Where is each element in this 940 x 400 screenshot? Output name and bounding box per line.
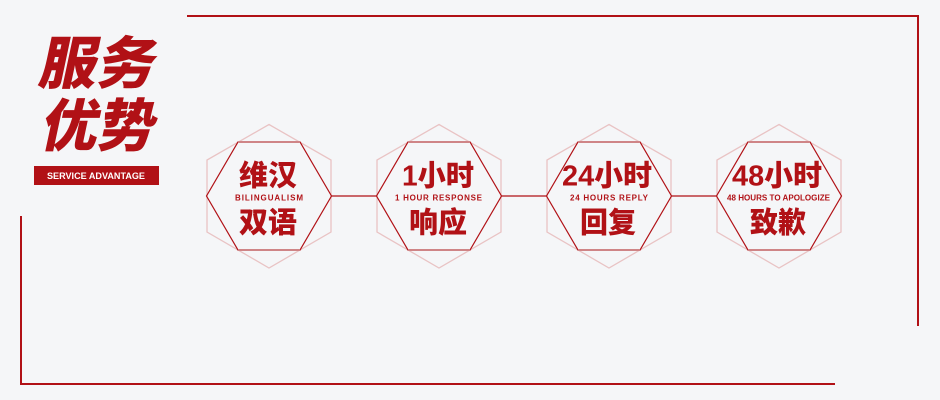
step 1: bilingualism: BILINGUALISM <box>235 194 303 202</box>
step 3: 24 hours reply: 24 HOURS REPLY <box>570 194 649 202</box>
step 1: bilingualism: 双语 <box>239 206 297 240</box>
step 2: 1 hour response: 1 HOUR RESPONSE <box>395 194 483 202</box>
step 3: 24 hours reply <box>546 124 672 268</box>
title <box>34 33 164 159</box>
step 4: 48 hours to apologize: 48小时 <box>732 160 822 192</box>
connector lines <box>331 195 717 197</box>
step 4: 48 hours to apologize <box>716 124 842 268</box>
frame: bottom left corner <box>21 216 835 384</box>
step 1: bilingualism <box>206 124 332 268</box>
step 3: 24 hours reply: 24小时 <box>562 160 652 192</box>
title: 优势 <box>36 96 164 159</box>
step 4: 48 hours to apologize: 致歉 <box>750 206 806 240</box>
step 2: 1 hour response <box>376 124 502 268</box>
step 3: 24 hours reply: 回复 <box>580 206 636 240</box>
step 2: 1 hour response: 1小时 <box>402 160 474 192</box>
frame: top right corner <box>187 16 918 326</box>
subtitle badge: SERVICE ADVANTAGE <box>47 171 145 182</box>
step 2: 1 hour response: 响应 <box>409 206 467 240</box>
subtitle badge <box>34 166 159 185</box>
step 1: bilingualism: 维汉 <box>239 160 297 192</box>
title: 服务 <box>34 33 164 96</box>
step 4: 48 hours to apologize: 48 HOURS TO APOLOGIZE <box>727 194 831 202</box>
